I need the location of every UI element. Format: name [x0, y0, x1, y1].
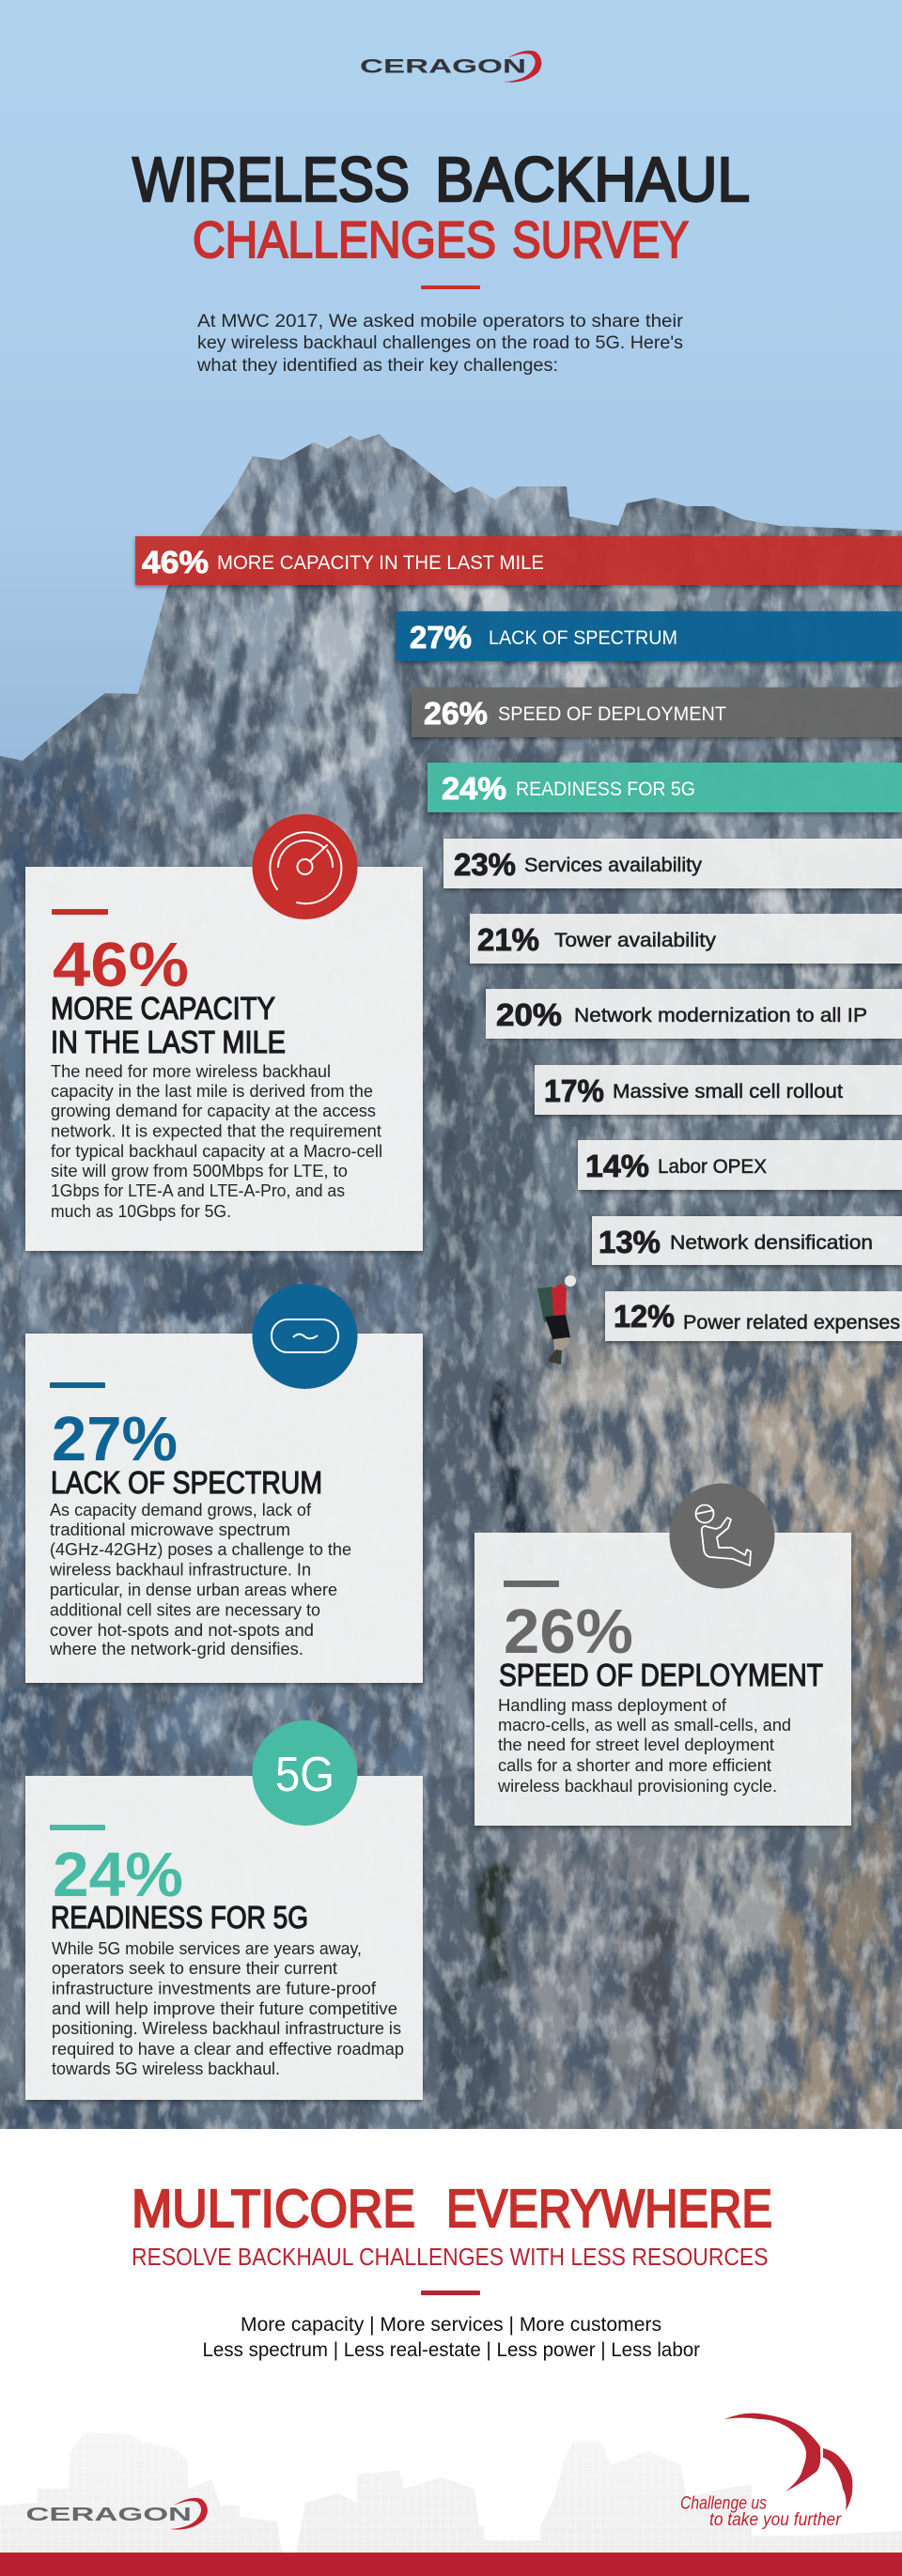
bar: 24% readiness for 5G [428, 763, 902, 812]
bar: 27% lack of spectrum: 27% [410, 620, 472, 655]
footer heading: MULTICORE [132, 2179, 415, 2239]
footer benefits text: More capacity | More services | More customers [241, 2314, 661, 2336]
tagline: Challenge us [680, 2494, 767, 2513]
panel: 27% lack of spectrum [25, 1284, 423, 1683]
footer heading: RESOLVE BACKHAUL CHALLENGES WITH LESS RESOURCES [132, 2243, 769, 2271]
body text: and will help improve their future competitive [52, 1999, 397, 2018]
body text: wireless backhaul infrastructure. In [49, 1561, 311, 1580]
intro text: At MWC 2017, We asked mobile operators to share their [197, 312, 684, 332]
heading: IN THE LAST MILE [51, 1025, 286, 1059]
body text: particular, in dense urban areas where [50, 1581, 337, 1599]
accent rule [52, 909, 108, 915]
icon: 5G: 5G [275, 1748, 334, 1802]
body text [52, 1939, 404, 2078]
body text: site will grow from 500Mbps for LTE, to [51, 1162, 348, 1180]
body text: calls for a shorter and more efficient [498, 1756, 771, 1775]
panel: 26% speed of deployment [474, 1484, 851, 1826]
tagline: to take you further [709, 2510, 842, 2530]
bar: 13% network densification: 13% [599, 1225, 661, 1259]
bar: 14% labor OPEX: Labor OPEX [658, 1156, 767, 1178]
body text: network. It is expected that the requirement [51, 1121, 381, 1140]
body text: macro-cells, as well as small-cells, and [498, 1716, 791, 1735]
bar: 26% speed of deployment: SPEED OF DEPLOYMENT [498, 703, 726, 725]
body text: additional cell sites are necessary to [50, 1600, 320, 1619]
accent rule [50, 1825, 105, 1830]
heading: SPEED OF DEPLOYMENT [499, 1658, 823, 1692]
intro text [196, 312, 684, 376]
bar: 46% more capacity: 46% [142, 545, 209, 579]
body text: infrastructure investments are future-proof [52, 1980, 377, 1998]
bar: 12% power related expenses: 12% [614, 1299, 675, 1334]
percentage: 24%: 24% [53, 1840, 183, 1910]
body text: While 5G mobile services are years away, [52, 1939, 362, 1958]
bar: 23% services availability: 23% [454, 847, 516, 882]
body text [49, 1501, 351, 1658]
body text: for typical backhaul capacity at a Macro-cell [51, 1142, 382, 1161]
footer red bar [0, 2553, 902, 2576]
bar: 26% speed of deployment [412, 687, 902, 737]
body text: required to have a clear and effective roadmap [52, 2040, 404, 2059]
percentage: 46%: 46% [53, 930, 189, 1000]
title: BACKHAUL [435, 145, 750, 215]
icon: 5G [252, 1720, 357, 1826]
body text: much as 10Gbps for 5G. [51, 1202, 231, 1221]
body text: (4GHz-42GHz) poses a challenge to the [50, 1540, 351, 1559]
percentage: 26%: 26% [504, 1597, 633, 1667]
mountain rock photo background [0, 423, 902, 2132]
bar: 20% network modernization: Network modernization to all IP [574, 1005, 867, 1026]
bar: 20% network modernization [486, 989, 902, 1039]
bar: 27% lack of spectrum [396, 611, 902, 661]
bar: 20% network modernization: 20% [496, 997, 562, 1032]
title: SURVEY [512, 210, 689, 269]
intro text: what they identified as their key challenges: [196, 356, 558, 376]
body text: The need for more wireless backhaul [51, 1062, 331, 1081]
title: CHALLENGES [193, 210, 496, 269]
bar: 17% massive small cell rollout: 17% [544, 1073, 604, 1108]
climber figure [537, 1275, 576, 1365]
bar: 46% more capacity: MORE CAPACITY IN THE LAST MILE [217, 552, 544, 574]
body text: where the network-grid densifies. [49, 1640, 303, 1658]
bar: 24% readiness for 5G: 24% [442, 771, 506, 806]
body text: 1Gbps for LTE-A and LTE-A-Pro, and as [51, 1181, 345, 1200]
bar: 14% labor OPEX: 14% [585, 1149, 649, 1183]
bar: 12% power related expenses [605, 1291, 902, 1341]
heading: LACK OF SPECTRUM [51, 1465, 322, 1500]
body text [497, 1696, 791, 1796]
body text: capacity in the last mile is derived from the [51, 1082, 373, 1101]
city skyline [0, 2428, 902, 2553]
icon: spectrum [252, 1284, 357, 1389]
bar: 12% power related expenses: Power related expenses [683, 1312, 900, 1334]
body text: growing demand for capacity at the access [51, 1102, 376, 1120]
bar: 46% more capacity [135, 536, 902, 585]
icon: worker [669, 1484, 774, 1589]
icon: speedometer [252, 814, 357, 919]
panel: 46% more capacity [25, 814, 423, 1251]
accent rule [504, 1581, 559, 1587]
body text: operators seek to ensure their current [52, 1959, 337, 1978]
footer benefits text [203, 2314, 700, 2361]
accent rule [50, 1382, 105, 1388]
logo: Ceragon bottom: CERAGON [26, 2505, 192, 2525]
body text [51, 1062, 382, 1221]
heading [51, 991, 286, 1059]
tagline [680, 2494, 842, 2530]
bar: 24% readiness for 5G: READINESS FOR 5G [516, 779, 695, 800]
body text: positioning. Wireless backhaul infrastructure is [52, 2019, 401, 2038]
bar: 14% labor OPEX [578, 1140, 902, 1190]
body text: As capacity demand grows, lack of [50, 1501, 312, 1519]
footer heading: EVERYWHERE [446, 2179, 772, 2239]
heading: MORE CAPACITY [51, 991, 275, 1026]
bar: 23% services availability: Services availability [524, 855, 703, 876]
footer benefits text: Less spectrum | Less real-estate | Less power | Less labor [203, 2339, 700, 2361]
logo: Ceragon top: CERAGON [360, 56, 526, 77]
bar: 26% speed of deployment: 26% [424, 696, 488, 731]
panel: 24% readiness for 5G [25, 1720, 423, 2100]
bar: 21% tower availability: Tower availability [554, 930, 717, 951]
title [132, 145, 750, 269]
logo: Ceragon bottom [26, 2498, 208, 2530]
bar: 21% tower availability [470, 914, 902, 964]
title rule [421, 285, 480, 289]
bar: 21% tower availability: 21% [477, 922, 539, 957]
body text: cover hot-spots and not-spots and [50, 1621, 314, 1640]
body text: the need for street level deployment [498, 1735, 774, 1754]
intro text: key wireless backhaul challenges on the road to 5G. Here's [197, 333, 683, 353]
bar: 23% services availability [443, 839, 902, 888]
bar: 13% network densification: Network densification [670, 1232, 873, 1254]
bar: 13% network densification [592, 1216, 902, 1265]
footer white background [0, 2129, 902, 2576]
footer rule [421, 2291, 480, 2295]
title: WIRELESS [132, 145, 410, 215]
heading: READINESS FOR 5G [51, 1900, 308, 1935]
body text: wireless backhaul provisioning cycle. [497, 1777, 777, 1796]
body text: towards 5G wireless backhaul. [52, 2059, 280, 2078]
body text: Handling mass deployment of [498, 1696, 727, 1715]
bar: 27% lack of spectrum: LACK OF SPECTRUM [489, 627, 677, 649]
sky background [0, 0, 902, 939]
bar: 17% massive small cell rollout [535, 1065, 902, 1115]
bar: 17% massive small cell rollout: Massive small cell rollout [613, 1081, 843, 1103]
body text: traditional microwave spectrum [50, 1520, 290, 1539]
footer heading [132, 2179, 772, 2271]
logo: Ceragon top [360, 51, 541, 83]
icon: tagline swoosh [724, 2414, 852, 2510]
percentage: 27%: 27% [52, 1404, 178, 1474]
